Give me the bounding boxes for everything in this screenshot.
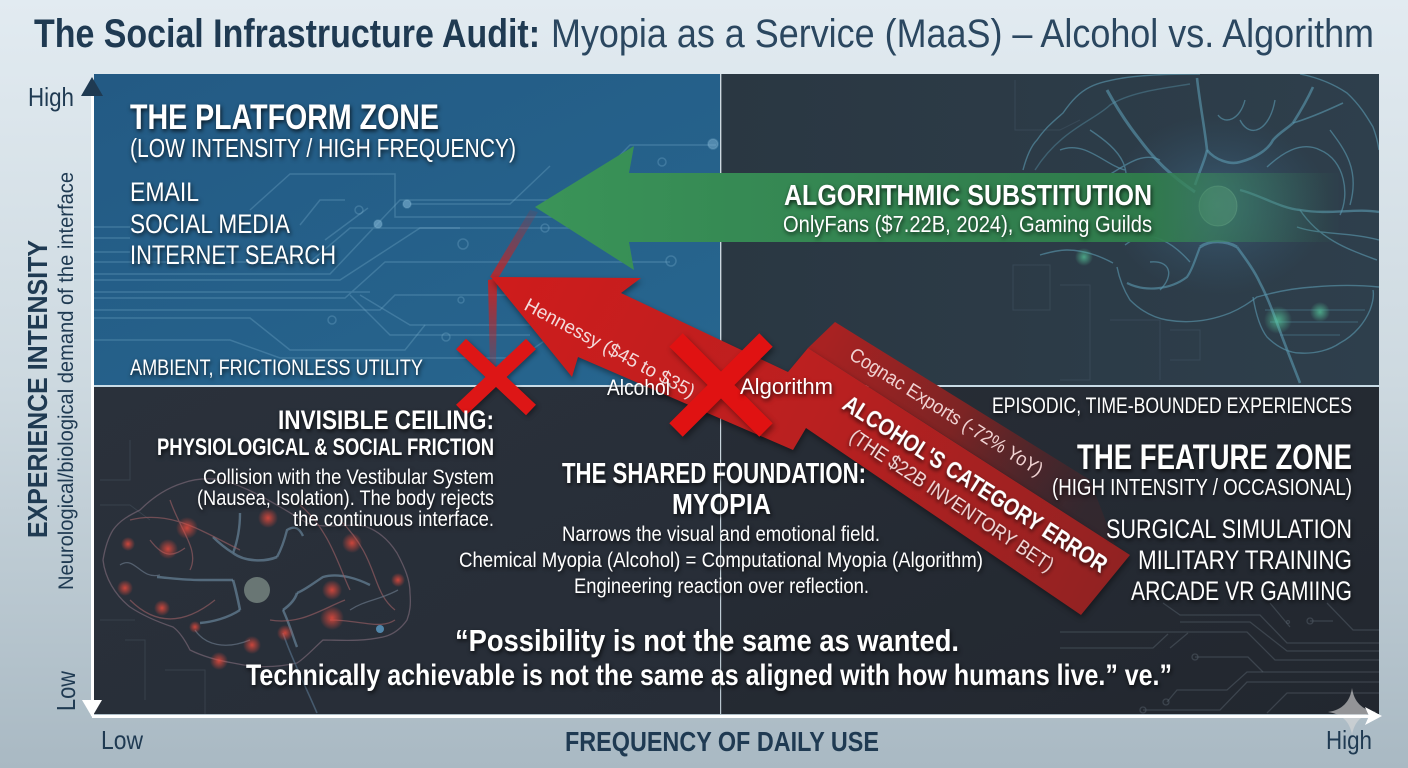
quote [246,623,1172,692]
subheading: physiological and social friction: PHYSIOLOGICAL & SOCIAL FRICTION [157,434,494,461]
text block: platform zone [130,98,516,380]
list: platform examples [130,177,336,270]
list: feature examples: SURGICAL SIMULATION [1106,514,1352,544]
arrow: alcohol's category error [491,277,1130,615]
list: platform examples: EMAIL [130,177,199,207]
panel: top right quadrant background with brain [721,74,1379,385]
icon: neural brain outline [1023,74,1379,383]
arrow: algorithmic substitution [535,146,1340,270]
watermark: star [1328,688,1376,735]
text: cognac exports: Cognac Exports (-72% YoY) [845,344,1047,481]
list: feature examples [1106,514,1352,606]
label: x axis low: Low [101,725,143,755]
body: myopia explanation: Narrows the visual and emotional field. [562,522,880,546]
heading: shared foundation myopia: MYOPIA [672,489,771,521]
label: algorithm: Algorithm [740,374,833,399]
quote: Technically achievable is not the same as aligned with how humans live.” ve.” [246,659,1172,692]
text block: invisible ceiling [157,405,494,531]
list: platform examples: SOCIAL MEDIA [130,209,290,239]
label: neurological demand: Neurological/biological demand of the interface [54,172,78,590]
label: x axis high: High [1326,725,1372,755]
arrow: faint path from blocked X to green arrow tip [488,210,538,372]
text: inventory bet: (THE $22B INVENTORY BET) [845,425,1058,577]
icon: red neural brain [103,479,410,713]
text: hennessy: Hennessy ($45 to $35) [521,295,698,403]
quadrant dividers [94,74,1379,714]
title: The Social Infrastructure Audit: [34,12,540,56]
text: category error heading: ALCOHOL'S CATEGORY ERROR [838,390,1112,579]
heading: the platform zone: THE PLATFORM ZONE [130,98,439,137]
caption: ambient utility: AMBIENT, FRICTIONLESS UTILITY [130,355,423,380]
panel: invisible ceiling quadrant background with brain [94,387,720,714]
text block: feature zone [992,393,1352,606]
body: vestibular collision: Collision with the Vestibular System [203,466,494,489]
body: myopia explanation: Chemical Myopia (Alcohol) = Computational Myopia (Algorithm) [459,548,983,572]
list: platform examples: INTERNET SEARCH [130,240,336,270]
list: feature examples: ARCADE VR GAMIING [1131,576,1352,606]
label: experience intensity: EXPERIENCE INTENSITY [22,240,53,538]
body: myopia explanation [459,522,983,598]
list: feature examples: MILITARY TRAINING [1138,545,1352,575]
icon: red X center [676,340,766,430]
title [34,12,1374,56]
x axis labels [101,725,1372,757]
body: vestibular collision: the continuous interface. [293,508,494,531]
y axis labels [22,82,81,711]
text: algorithmic substitution heading: ALGORITHMIC SUBSTITUTION [784,180,1152,212]
icon: red X left [461,344,531,410]
x axis arrow [92,707,1382,725]
label: y axis low: Low [51,671,81,711]
quote: “Possibility is not the same as wanted. [455,623,959,658]
subheading: low intensity high frequency: (LOW INTENSITY / HIGH FREQUENCY) [130,133,516,163]
heading: invisible ceiling: INVISIBLE CEILING: [278,405,494,435]
panel: platform zone background [94,74,720,385]
text: algorithmic substitution detail: OnlyFans ($7.22B, 2024), Gaming Guilds [783,211,1152,237]
body: vestibular collision: (Nausea, Isolation). The body rejects [197,487,494,510]
panel: feature zone background [721,387,1379,714]
text block: shared foundation [459,458,983,598]
y axis arrow [81,77,103,717]
body: vestibular collision [197,466,494,531]
heading: shared foundation myopia [562,458,866,521]
arrow: cognac exports band [808,322,1115,545]
body: myopia explanation: Engineering reaction over reflection. [574,574,869,598]
heading: shared foundation myopia: THE SHARED FOUNDATION: [562,458,866,490]
label: frequency of daily use: FREQUENCY OF DAILY USE [565,726,879,757]
label: y axis high: High [28,82,74,112]
label: alcohol: Alcohol [607,375,670,400]
